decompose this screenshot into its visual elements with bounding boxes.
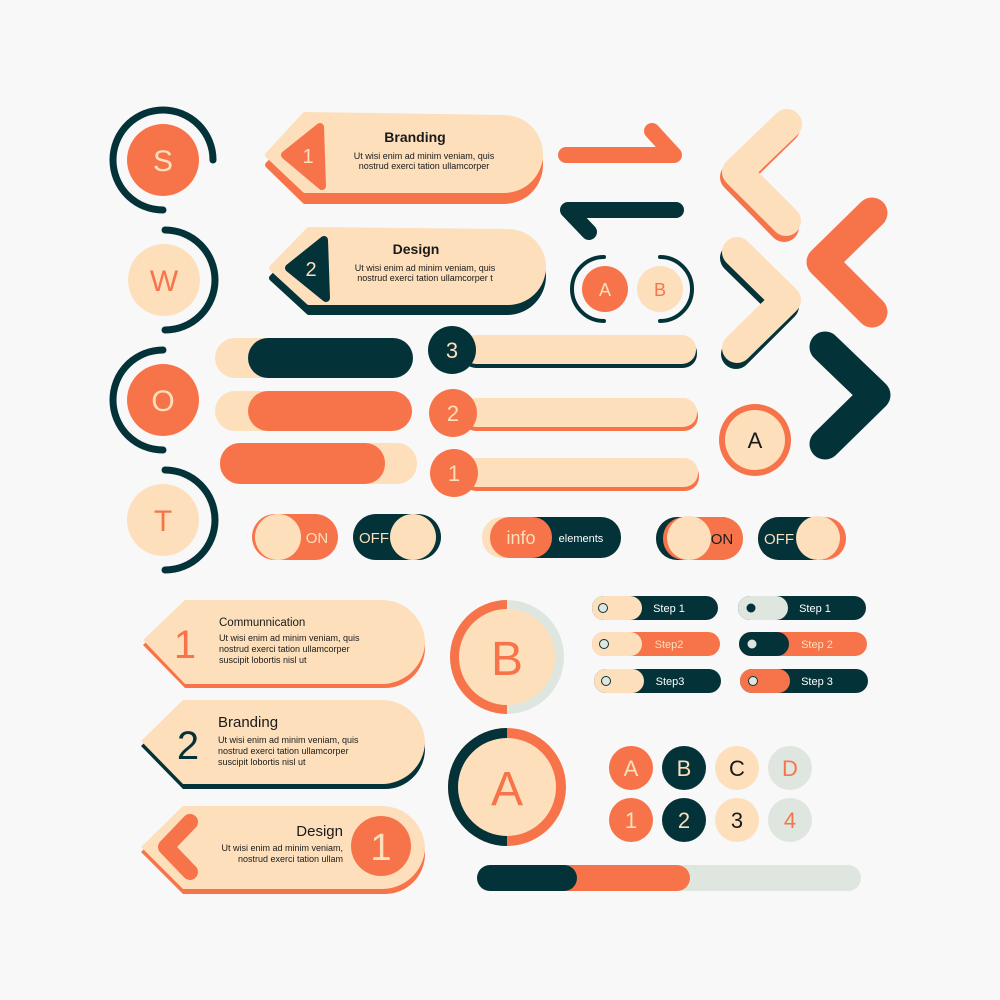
chevron: peach right	[735, 252, 786, 354]
T circle	[127, 470, 215, 570]
panel: Design arrow tag: Ut wisi enim ad minim veniam, quis	[355, 263, 496, 273]
step toggles: Step 2	[801, 639, 833, 651]
S circle: S	[153, 145, 173, 178]
SWOT column	[113, 110, 215, 570]
toggle: OFF 1	[353, 514, 441, 560]
O circle: O	[151, 385, 175, 418]
AB bracket circles	[572, 257, 692, 321]
panel: Design tag 2	[141, 806, 425, 894]
panel: Communication tag: 1	[174, 623, 196, 667]
step toggles	[592, 596, 868, 693]
panel: Communication tag	[143, 600, 425, 688]
W circle: W	[150, 265, 179, 298]
letter and number circles: 1	[625, 808, 637, 833]
numbered progress bars: 3	[446, 338, 458, 363]
A ring circle: A	[748, 428, 763, 453]
panel: Branding arrow tag: nostrud exerci tation ullamcorper	[359, 161, 489, 171]
letter and number circles	[609, 746, 812, 842]
chevron: orange left	[822, 213, 872, 312]
step toggles: Step2	[655, 639, 683, 651]
AB bracket circles: A	[599, 280, 611, 300]
panel: Branding arrow tag: Branding	[384, 129, 446, 145]
S circle	[113, 110, 213, 210]
panel: Communication tag: Ut wisi enim ad minim veniam, quis	[219, 633, 360, 643]
panel: Communication tag: suscipit lobortis nisl ut	[219, 655, 307, 665]
letter and number circles: 2	[678, 808, 690, 833]
panel: Design arrow tag: 2	[305, 259, 317, 281]
T circle: T	[154, 505, 172, 538]
A progress ring	[448, 728, 566, 846]
letter and number circles: A	[624, 756, 639, 781]
arrow: orange right	[566, 131, 674, 155]
numbered progress bars: 1	[448, 461, 460, 486]
B progress ring	[450, 600, 564, 714]
toggle: info elements: info	[506, 528, 536, 548]
A ring circle	[719, 404, 791, 476]
O circle	[113, 350, 199, 450]
panel: Design tag 2: nostrud exerci tation ullam	[238, 854, 343, 864]
panel: Branding tag 2: 2	[177, 724, 199, 768]
panel: Communication tag: Communnication	[219, 617, 305, 629]
panel: Design tag 2: Ut wisi enim ad minim veniam,	[221, 843, 343, 853]
panel: Branding tag 2: Ut wisi enim ad minim veniam, quis	[218, 735, 359, 745]
letter and number circles: 3	[731, 808, 743, 833]
toggle: OFF 2	[758, 516, 846, 560]
panel: Design arrow tag: Design	[393, 241, 439, 257]
letter and number circles: 4	[784, 808, 796, 833]
panel: Design tag 2: 1	[370, 827, 392, 869]
toggle: ON 2: ON	[711, 531, 733, 548]
panel: Branding tag 2	[141, 700, 425, 789]
left pill bars	[215, 338, 417, 484]
B progress ring: B	[491, 633, 523, 686]
chevron: dark right	[825, 347, 875, 444]
chevron: peach left	[735, 124, 787, 227]
numbered progress bars: 2	[447, 401, 459, 426]
step toggles: Step3	[656, 676, 684, 688]
toggle: info elements	[482, 517, 621, 558]
toggle: ON 1: ON	[306, 530, 328, 547]
step toggles: Step 1	[799, 603, 831, 615]
panel: Design arrow tag	[272, 230, 543, 312]
panel: Design arrow tag: nostrud exerci tation ullamcorper t	[357, 273, 493, 283]
chevrons	[735, 124, 875, 444]
segmented progress bar	[477, 865, 861, 891]
toggle: OFF 2: OFF	[764, 531, 794, 548]
panel: Branding arrow tag: 1	[302, 146, 314, 168]
toggle: ON 2	[656, 516, 743, 560]
W circle	[128, 230, 215, 330]
A progress ring: A	[491, 763, 523, 816]
panel: Branding tag 2: Branding	[218, 714, 278, 731]
letter and number circles: B	[677, 756, 691, 781]
panel: Branding arrow tag: Ut wisi enim ad minim veniam, quis	[354, 151, 495, 161]
panel: Communication tag: nostrud exerci tation ullamcorper	[219, 644, 350, 654]
letter and number circles: C	[729, 756, 745, 781]
arrow: dark left	[568, 210, 676, 232]
toggle: info elements: elements	[559, 533, 604, 545]
step toggles: Step 1	[653, 603, 685, 615]
panel: Branding tag 2: nostrud exerci tation ullamcorper	[218, 746, 349, 756]
panel: Design tag 2: Design	[296, 823, 343, 840]
numbered progress bars	[428, 326, 699, 497]
toggle: OFF 1: OFF	[359, 530, 389, 547]
toggle: ON 1	[252, 514, 338, 560]
panel: Branding arrow tag	[268, 115, 540, 201]
panel: Branding tag 2: suscipit lobortis nisl ut	[218, 757, 306, 767]
AB bracket circles: B	[654, 280, 666, 300]
step toggles: Step 3	[801, 676, 833, 688]
letter and number circles: D	[782, 756, 798, 781]
